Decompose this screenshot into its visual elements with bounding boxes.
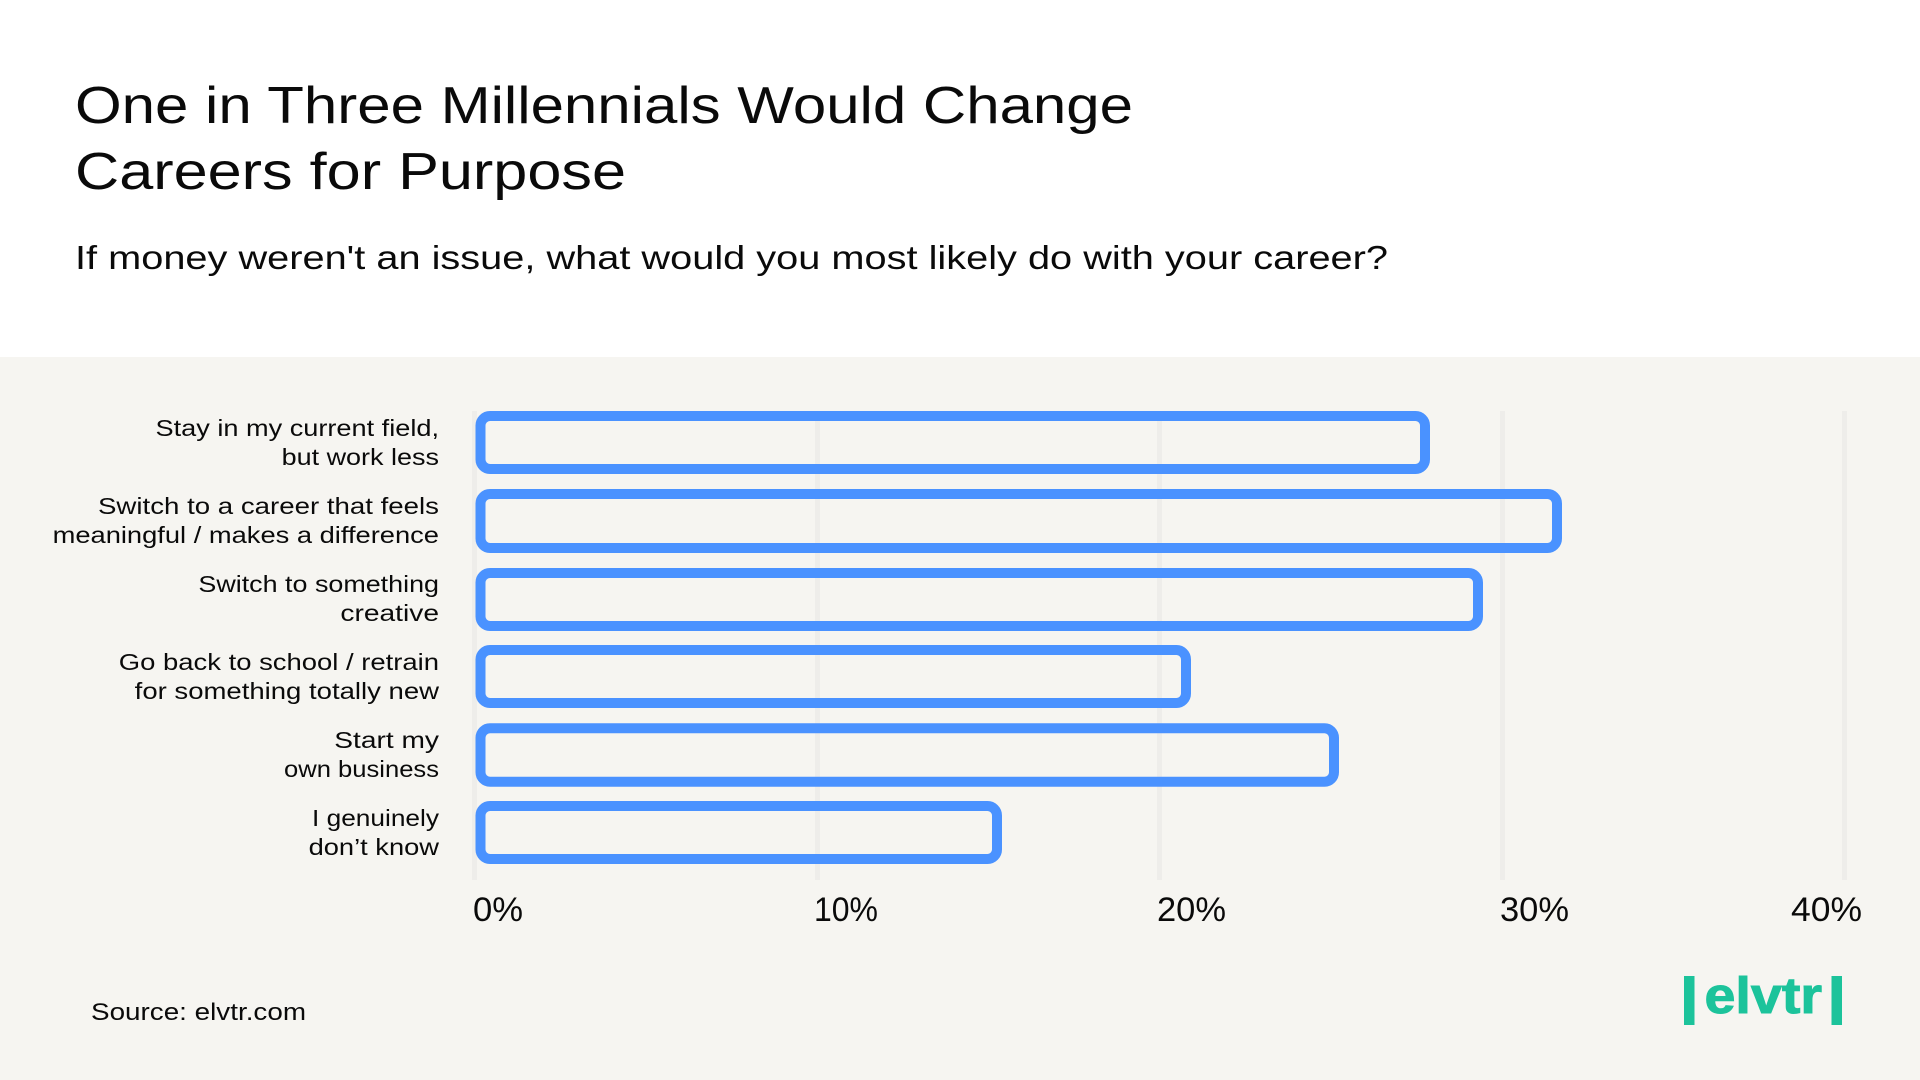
label: own business: own business xyxy=(284,756,439,782)
label: something creative: creative xyxy=(340,600,439,626)
axis: 10%: 10% xyxy=(814,891,878,929)
axis: 20%: 20% xyxy=(1157,891,1226,929)
label: back to school xyxy=(119,649,440,704)
bar: stay in field xyxy=(480,416,1425,469)
axis: 30%: 30% xyxy=(1500,891,1569,929)
bar: back to school xyxy=(480,650,1186,703)
panel: chart background xyxy=(0,357,1920,1080)
axis labels xyxy=(473,891,1862,929)
panel: header xyxy=(0,0,1920,357)
bars xyxy=(480,416,1557,859)
bar: own business xyxy=(480,728,1334,782)
logo: elvtr xyxy=(1684,967,1842,1025)
label: something creative: Switch to something xyxy=(198,571,439,597)
bar chart xyxy=(53,411,1862,929)
category labels xyxy=(53,415,440,860)
label: don't know: don’t know xyxy=(309,834,440,860)
title xyxy=(75,77,1133,201)
label: back to school: for something totally new xyxy=(135,678,440,704)
label: something creative xyxy=(198,571,439,626)
title: One in Three Millennials Would Change xyxy=(75,77,1133,135)
label: stay in field: Stay in my current field, xyxy=(156,415,439,441)
bar: something creative xyxy=(480,573,1478,626)
bar: meaningful career xyxy=(480,494,1557,548)
axis: 0%: 0% xyxy=(473,891,523,929)
source note: Source: elvtr.com xyxy=(91,999,306,1026)
label: back to school: Go back to school / retrain xyxy=(119,649,439,675)
bar: don't know xyxy=(480,806,997,859)
label: own business xyxy=(284,727,439,782)
axis: 40%: 40% xyxy=(1791,891,1862,929)
label: meaningful career: Switch to a career that feels xyxy=(98,493,439,519)
subtitle: If money weren't an issue, what would you most likely do with your career? xyxy=(75,239,1388,276)
logo: elvtr: elvtr xyxy=(1704,967,1822,1024)
title: Careers for Purpose xyxy=(75,143,626,201)
label: own business: Start my xyxy=(334,727,439,753)
label: don't know xyxy=(309,805,440,860)
label: meaningful career: meaningful / makes a difference xyxy=(53,522,439,548)
label: don't know: I genuinely xyxy=(312,805,439,831)
label: meaningful career xyxy=(53,493,439,548)
label: stay in field xyxy=(156,415,439,470)
grid lines xyxy=(472,411,1847,880)
label: stay in field: but work less xyxy=(282,444,439,470)
